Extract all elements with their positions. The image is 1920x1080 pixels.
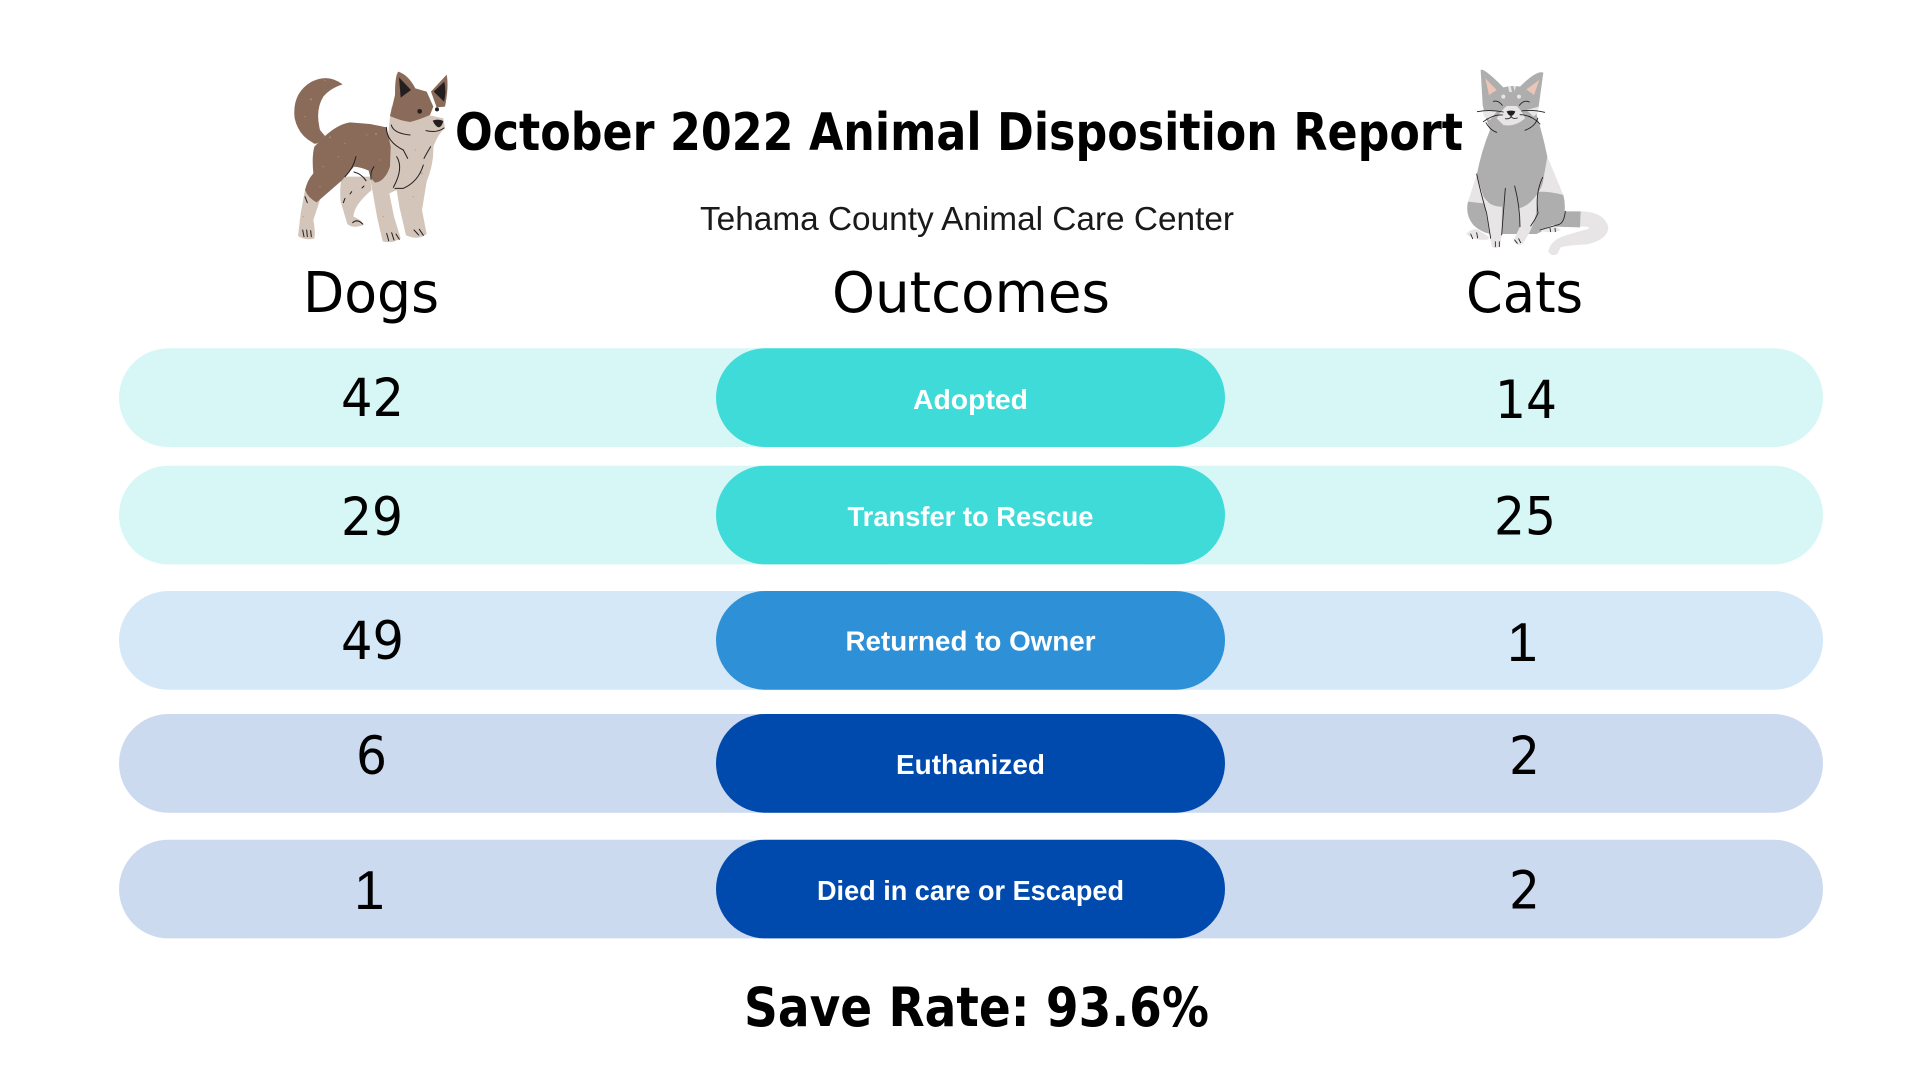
icon: cat	[1466, 70, 1608, 255]
dogs died or escaped count: 1	[354, 859, 385, 921]
outcome pill: died in care or escaped	[716, 840, 1225, 938]
cats transferred count: 25	[1494, 486, 1556, 548]
row: adopted	[119, 348, 1823, 447]
column heading: cats: Cats	[1466, 261, 1583, 326]
outcome pill: returned to owner	[716, 591, 1225, 690]
cats adopted count: 14	[1495, 370, 1557, 431]
dogs euthanized count: 6	[356, 726, 387, 787]
outcome pill: euthanized	[716, 714, 1225, 813]
column heading: dogs: Dogs	[303, 261, 439, 326]
subtitle: Tehama County Animal Care Center	[700, 200, 1234, 237]
row: euthanized	[119, 714, 1823, 813]
row: returned to owner	[119, 591, 1823, 690]
outcome pill: transfer to rescue: Transfer to Rescue	[848, 501, 1094, 532]
dogs adopted count: 42	[341, 368, 404, 429]
outcome pill: returned to owner: Returned to Owner	[846, 626, 1096, 657]
outcome pill: died in care or escaped: Died in care or Escaped	[817, 875, 1124, 906]
cats returned count: 1	[1507, 611, 1538, 673]
column heading: outcomes: Outcomes	[832, 261, 1110, 326]
title: October 2022 Animal Disposition Report	[455, 103, 1463, 163]
icon: dog	[294, 72, 448, 242]
dogs returned count: 49	[341, 611, 404, 672]
cats died or escaped count: 2	[1509, 860, 1540, 922]
cats euthanized count: 2	[1509, 726, 1540, 787]
outcome pill: adopted: Adopted	[913, 384, 1028, 415]
outcome pill: euthanized: Euthanized	[896, 749, 1045, 780]
dogs transferred count: 29	[341, 487, 403, 548]
row: transfer to rescue	[119, 466, 1823, 564]
outcome pill: adopted	[716, 348, 1225, 447]
row: died in care or escaped	[119, 840, 1823, 938]
outcome pill: transfer to rescue	[716, 466, 1225, 564]
save rate: Save Rate: 93.6%	[744, 976, 1209, 1039]
